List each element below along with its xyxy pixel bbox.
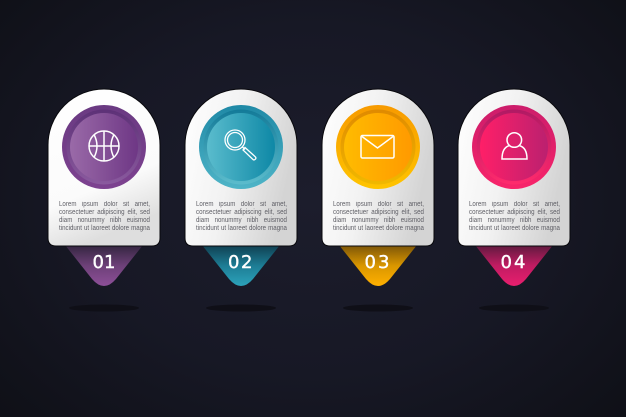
number: 03 — [365, 252, 391, 273]
text block — [59, 201, 150, 232]
icon disc — [199, 105, 283, 189]
floor shadow — [206, 304, 276, 312]
text block: tincidunt ut laoreet dolore magna — [59, 225, 150, 232]
icon: envelope — [361, 136, 394, 158]
floor shadow — [343, 304, 413, 312]
pointer — [202, 245, 280, 286]
floor shadow — [69, 304, 139, 312]
card — [322, 89, 434, 246]
text block: Lorem ipsum dolor sit amet, — [333, 201, 424, 208]
icon: person — [502, 133, 527, 159]
text block: consectetuer adipiscing elit, sed — [196, 209, 287, 216]
panel: step 02 — [184, 88, 298, 312]
icon: basketball — [89, 131, 119, 161]
number: 02 — [228, 252, 254, 273]
floor shadow — [479, 304, 549, 312]
icon disc — [62, 105, 146, 189]
icon disc — [336, 105, 420, 189]
pointer — [339, 245, 417, 286]
panel: step 01 — [48, 88, 160, 312]
number: 04 — [501, 252, 527, 273]
icon: magnifier — [225, 130, 256, 160]
text block: diam nonummy nibh euismod — [333, 217, 424, 224]
panel: step 04 — [458, 88, 570, 312]
text block: tincidunt ut laoreet dolore magna — [469, 225, 560, 232]
text block: consectetuer adipiscing elit, sed — [469, 209, 560, 216]
text block: Lorem ipsum dolor sit amet, — [196, 201, 287, 208]
card — [458, 89, 570, 246]
text block: consectetuer adipiscing elit, sed — [59, 209, 150, 216]
text block: consectetuer adipiscing elit, sed — [333, 209, 424, 216]
pointer — [65, 245, 143, 286]
text block: tincidunt ut laoreet dolore magna — [333, 225, 424, 232]
text block: tincidunt ut laoreet dolore magna — [196, 225, 287, 232]
text block: Lorem ipsum dolor sit amet, — [469, 201, 560, 208]
panel: step 03 — [322, 88, 434, 312]
pointer — [475, 245, 553, 286]
text block — [469, 201, 560, 232]
text block: diam nonummy nibh euismod — [469, 217, 560, 224]
text block: Lorem ipsum dolor sit amet, — [59, 201, 150, 208]
number: 01 — [93, 252, 115, 273]
card — [185, 89, 297, 246]
text block: diam nonummy nibh euismod — [196, 217, 287, 224]
text block — [333, 201, 424, 232]
text block: diam nonummy nibh euismod — [59, 217, 150, 224]
card — [48, 89, 160, 246]
icon disc — [472, 105, 556, 189]
text block — [196, 201, 287, 232]
